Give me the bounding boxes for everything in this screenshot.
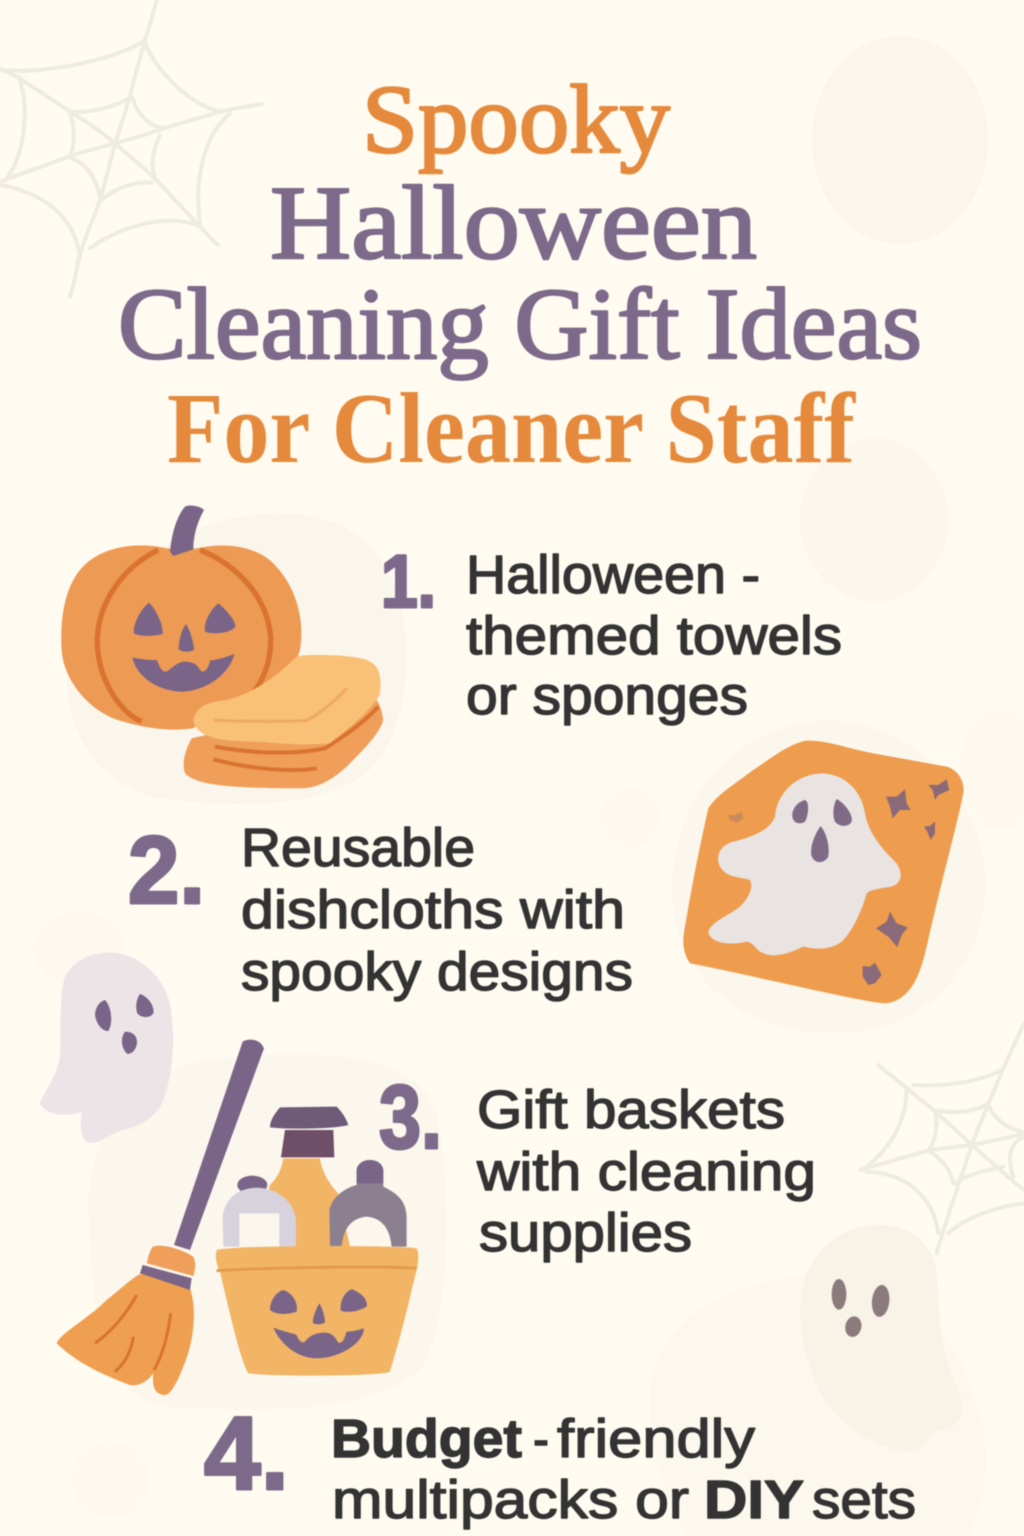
- icon: orange dishcloth: [683, 741, 964, 1003]
- title: Spooky: [362, 66, 671, 173]
- icon: broom: [57, 1040, 264, 1395]
- text: item 4: Budget: [331, 1409, 522, 1469]
- icon: white bottle: [223, 1176, 296, 1247]
- text: item 2: [241, 818, 633, 1002]
- icon: pumpkin basket: [216, 1246, 418, 1376]
- title: Halloween: [270, 164, 757, 281]
- decorative ghost: left: [33, 912, 173, 1143]
- icon: ghost on cloth: [708, 773, 901, 955]
- panel: item 2 ghost dishcloth: [672, 720, 985, 1033]
- decorative ghost: bottom right: [649, 1225, 986, 1536]
- text: item 3: with cleaning: [476, 1142, 816, 1202]
- text: item 1: [466, 545, 842, 726]
- number 2: 2.: [128, 817, 205, 924]
- text: item 2: spooky designs: [241, 942, 633, 1002]
- text: item 4: sets: [812, 1470, 916, 1530]
- icon: pumpkin: [61, 505, 301, 730]
- text: item 4: multipacks or: [332, 1470, 689, 1530]
- text: item 1: themed towels: [466, 606, 842, 666]
- text: item 2: Reusable: [241, 818, 475, 878]
- title: [118, 66, 922, 484]
- text: item 4: DIY: [704, 1470, 804, 1530]
- text: item 4: [331, 1409, 916, 1530]
- icon: folded towels: [184, 655, 383, 788]
- text: item 1: Halloween -: [466, 545, 760, 605]
- panel: item 3 basket and broom: [57, 1040, 447, 1410]
- number 3: 3.: [379, 1068, 442, 1168]
- title: Cleaning Gift Ideas: [118, 268, 922, 381]
- text: item 3: [476, 1080, 816, 1263]
- icon: grey bottle: [329, 1160, 407, 1247]
- text: item 2: dishcloths with: [241, 880, 625, 940]
- title: For Cleaner Staff: [167, 372, 856, 484]
- icon: cloth stars: [728, 779, 949, 985]
- panel: item 1 pumpkin and towels: [61, 505, 407, 804]
- text: item 4: -: [533, 1409, 549, 1469]
- icon: spray bottle: [269, 1107, 350, 1247]
- number 4: 4.: [204, 1396, 289, 1512]
- text: item 3: Gift baskets: [477, 1080, 785, 1140]
- cobweb: right: [860, 1023, 1024, 1253]
- text: item 1: or sponges: [466, 666, 748, 726]
- cobweb: top left: [0, 0, 262, 297]
- number 1: 1.: [381, 540, 436, 623]
- text: item 4: friendly: [557, 1409, 755, 1469]
- text: item 3: supplies: [479, 1203, 692, 1263]
